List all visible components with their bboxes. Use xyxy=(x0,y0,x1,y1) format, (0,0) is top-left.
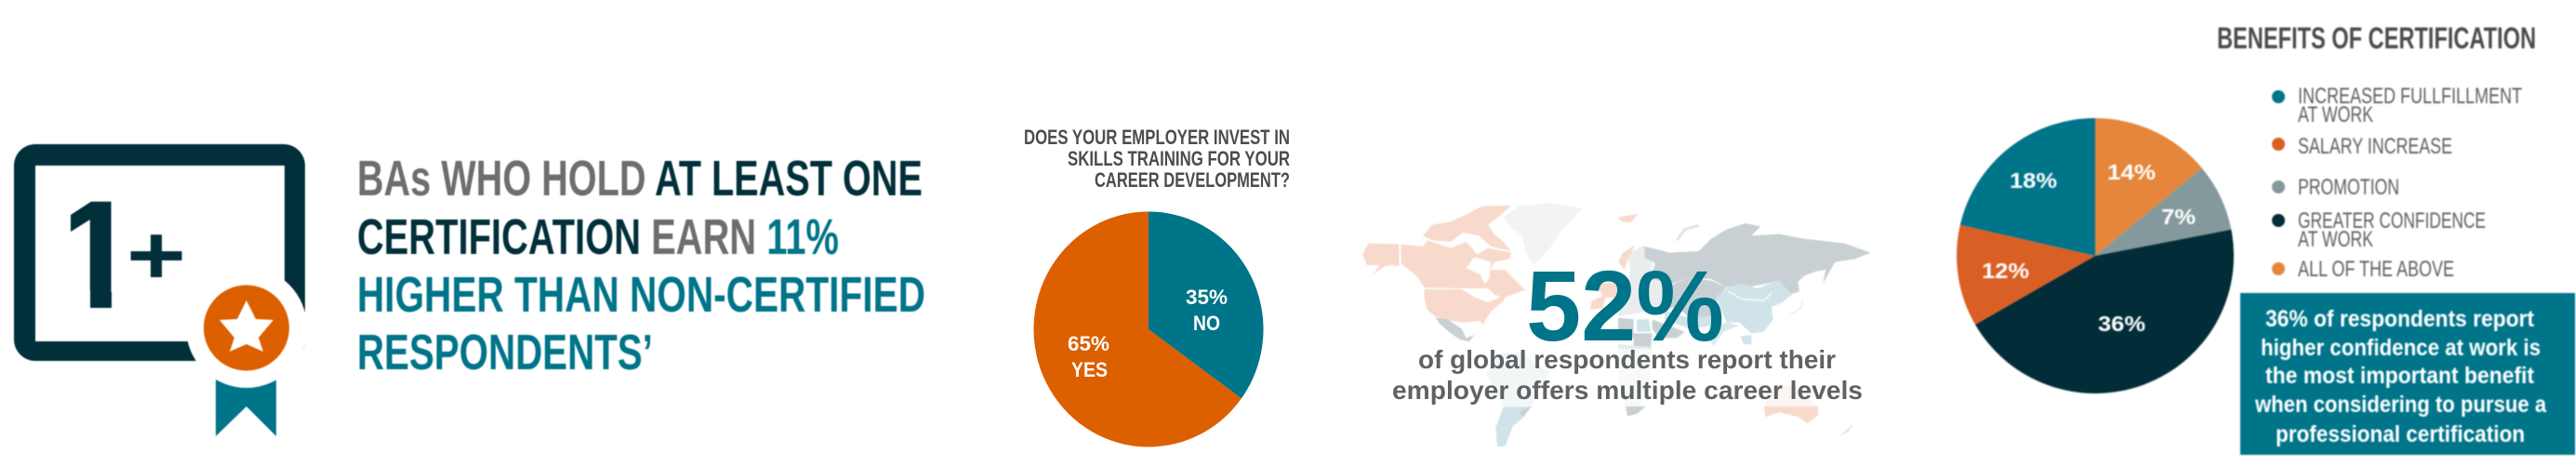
heading: earnings statement: HIGHER THAN NON-CERTIFIED xyxy=(357,267,925,323)
heading: skills training question: SKILLS TRAINING FOR YOUR xyxy=(1068,147,1290,170)
callout: higher confidence at work: the most important benefit xyxy=(2265,363,2535,389)
legend: benefit categories: PROMOTION xyxy=(2298,175,2399,200)
pie chart: benefits: 14% xyxy=(2107,160,2156,184)
callout: higher confidence at work: when considering to pursue a xyxy=(2254,392,2547,418)
panel: global career levels xyxy=(1362,203,1888,446)
pie chart: benefits: 36% xyxy=(2098,312,2145,336)
heading: earnings statement: RESPONDENTS’ xyxy=(357,325,653,380)
heading: earnings statement xyxy=(357,151,925,380)
pie chart: yes and no: 65% xyxy=(1068,332,1109,355)
text: multiple career levels xyxy=(1392,345,1863,405)
legend: benefit categories: ALL OF THE ABOVE xyxy=(2298,257,2454,282)
map: world background xyxy=(1362,203,1888,446)
callout: higher confidence at work: professional certification xyxy=(2276,421,2525,447)
text: multiple career levels: of global respondents report their xyxy=(1418,345,1836,374)
legend: benefit categories: AT WORK xyxy=(2298,102,2373,127)
heading: skills training question: DOES YOUR EMPLOYER INVEST IN xyxy=(1024,126,1290,149)
panel: employer skills training xyxy=(1024,126,1290,447)
panel: benefits of certification xyxy=(1957,21,2575,455)
legend: benefit categories: SALARY INCREASE xyxy=(2298,134,2452,159)
icon: certificate with medal: + xyxy=(126,209,186,302)
pie chart: benefits: 12% xyxy=(1982,259,2029,283)
icon: certificate with medal: 1 xyxy=(54,169,139,341)
pie chart: yes and no: 35% xyxy=(1186,286,1228,309)
statistic: 52 percent: 52% xyxy=(1526,249,1724,362)
pie chart: benefits xyxy=(1957,118,2234,393)
pie chart: yes and no xyxy=(1034,212,1264,447)
text: multiple career levels: employer offers multiple career levels xyxy=(1392,376,1863,405)
callout: higher confidence at work: higher confidence at work is xyxy=(2261,335,2541,361)
pie chart: yes and no: YES xyxy=(1071,358,1108,381)
legend: benefit categories: AT WORK xyxy=(2298,227,2373,252)
pie chart: benefits: 18% xyxy=(2010,168,2057,193)
legend: benefit categories: GREATER CONFIDENCE xyxy=(2298,208,2486,233)
heading: earnings statement: CERTIFICATION EARN 11% xyxy=(357,209,839,265)
pie chart: benefits: 7% xyxy=(2161,205,2196,229)
callout: higher confidence at work: 36% of respondents report xyxy=(2265,306,2535,332)
pie chart: yes and no: NO xyxy=(1193,312,1220,335)
callout: higher confidence at work xyxy=(2240,293,2575,455)
heading: skills training question xyxy=(1024,126,1290,192)
panel: certification earnings xyxy=(14,144,925,436)
icon: certificate with medal xyxy=(14,144,307,436)
legend: benefit categories xyxy=(2272,84,2522,282)
heading: earnings statement: BAs WHO HOLD AT LEAST ONE xyxy=(357,151,923,206)
heading: skills training question: CAREER DEVELOPMENT? xyxy=(1095,168,1290,192)
